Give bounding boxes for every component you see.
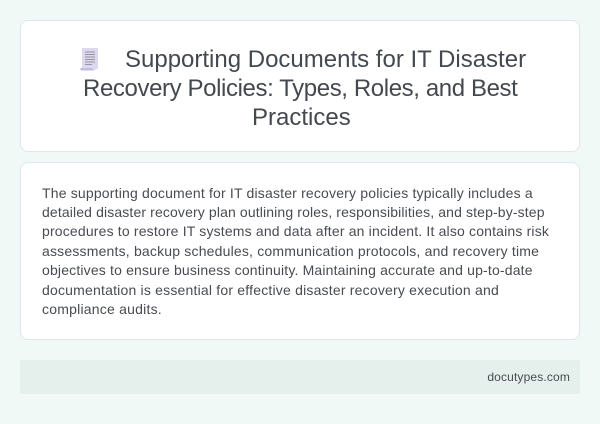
text block: description [42, 185, 549, 317]
text block: description: detailed disaster recovery plan outlining roles, responsibilities, and step-by-step [42, 204, 545, 220]
panel: description card [20, 162, 580, 340]
title [83, 46, 526, 131]
text block: description: compliance audits. [42, 301, 162, 317]
title: Supporting Documents for IT Disaster [125, 46, 526, 73]
text block: description: documentation is essential for effective disaster recovery execution and [42, 282, 499, 298]
icon: document [80, 48, 98, 70]
title: Practices [252, 104, 351, 131]
text block: description: The supporting document for IT disaster recovery policies typically includes a [42, 185, 533, 201]
footer text: docutypes.com [487, 370, 570, 384]
panel: title card [20, 20, 580, 152]
title: Recovery Policies: Types, Roles, and Best [83, 75, 517, 102]
footer bar [20, 360, 580, 394]
text block: description: objectives to ensure business continuity. Maintaining accurate and up-to-date [42, 262, 533, 278]
text block: description: assessments, backup schedules, communication protocols, and recovery time [42, 243, 539, 259]
text block: description: procedures to restore IT systems and data after an incident. It also contains risk [42, 223, 549, 239]
